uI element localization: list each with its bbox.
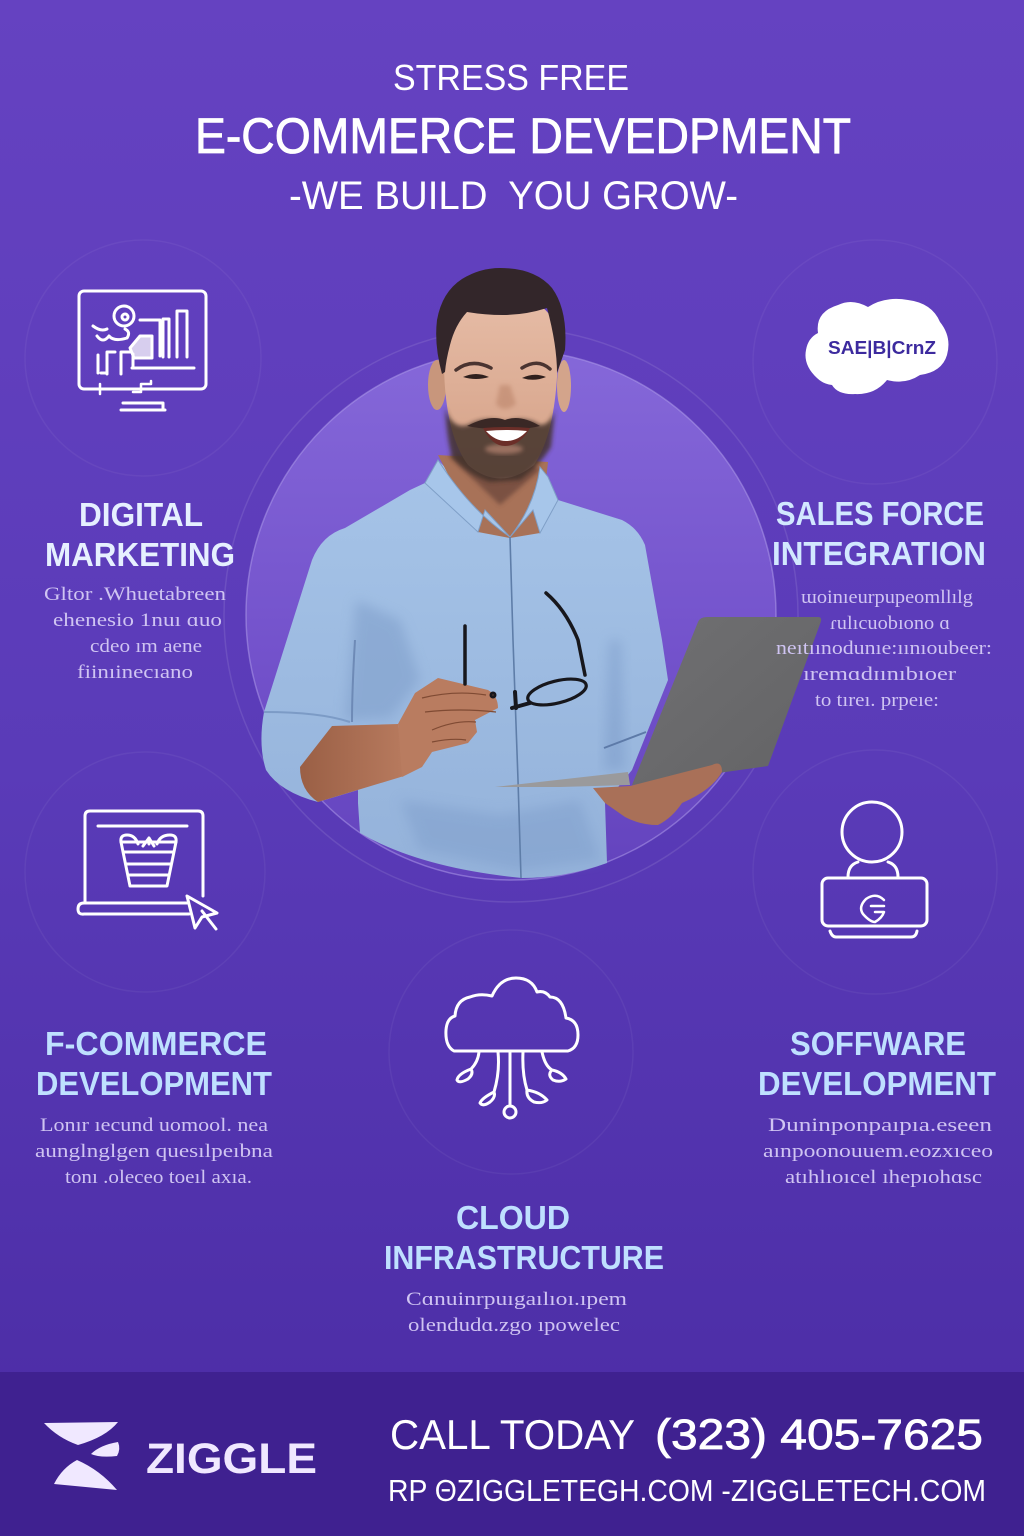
neck (438, 455, 548, 538)
text: software development (763, 1115, 993, 1188)
text: software development: atıhlıoıcel ıhepıohɑsc (785, 1167, 982, 1188)
laptop lid (632, 617, 821, 785)
logo wordmark: ZIGGLE (146, 1435, 317, 1483)
text: digital marketing: ehenesio 1nuı ɑuo (53, 610, 222, 631)
icon: cloud network (446, 978, 578, 1118)
forearm (300, 724, 404, 802)
heading: e-commerce development (36, 1025, 272, 1102)
eyes and brows (456, 363, 550, 370)
panel: sales force integration (772, 299, 992, 711)
heading: cloud infrastructure: INFRASTRUCTURE (384, 1239, 664, 1276)
heading: digital marketing: MARKETING (45, 536, 235, 573)
glasses (465, 593, 589, 710)
icon rings (25, 240, 997, 1174)
right hand (593, 764, 722, 825)
face (444, 296, 558, 478)
text: digital marketing: fiinıinecıano (77, 662, 193, 683)
call to action: CALL TODAY (390, 1411, 635, 1458)
text: sales force integration (776, 587, 992, 711)
heading: sales force integration (772, 495, 986, 572)
footer band (0, 1372, 1024, 1536)
panel: e-commerce development (35, 811, 274, 1188)
title: stress free: STRESS FREE (393, 57, 629, 98)
text: digital marketing: cdeo ım aene (90, 636, 202, 657)
text: e-commerce development: Lonır ıecund uomool. nea (40, 1115, 269, 1136)
icon: salesforce cloud: SAE|B|CrnZ (828, 338, 936, 358)
heading: software development: DEVELOPMENT (758, 1065, 996, 1102)
man holding laptop and glasses (261, 268, 821, 878)
heading: cloud infrastructure (384, 1199, 664, 1276)
text: sales force integration: ɯoinıeurpupeomllılg (801, 587, 974, 608)
text: sales force integration: ɾulıcuobıono ɑ (830, 613, 950, 634)
text: digital marketing (44, 584, 227, 683)
shirt (261, 460, 668, 878)
icon: person at laptop (822, 802, 927, 937)
head (428, 268, 571, 482)
text: software development: Duninponpaıpıa.eseen (768, 1115, 993, 1136)
heading: digital marketing: DIGITAL (79, 496, 203, 533)
text: sales force integration: neıtıınodunıe:ıınıoubeer: (776, 638, 992, 659)
heading: e-commerce development: DEVELOPMENT (36, 1065, 272, 1102)
laptop base (495, 772, 630, 787)
title: e-commerce: E-COMMERCE DEVEDPMENT (195, 108, 851, 164)
title block (195, 57, 851, 218)
heading: software development (758, 1025, 996, 1102)
hair (436, 268, 565, 374)
icon: laptop basket (78, 811, 217, 929)
heading: sales force integration: INTEGRATION (772, 535, 986, 572)
text: e-commerce development (35, 1115, 274, 1188)
heading: software development: SOFFWARE (790, 1025, 966, 1062)
text: cloud infrastructure: olendudɑ.zgo ıpowelec (408, 1315, 620, 1336)
heading: cloud infrastructure: CLOUD (456, 1199, 570, 1236)
panel: digital marketing (44, 291, 235, 683)
text: e-commerce development: aunglnglgen quesılpeıbna (35, 1141, 274, 1162)
hand (398, 678, 498, 777)
shirt shading (264, 600, 646, 870)
beard (445, 407, 555, 482)
collar (425, 460, 558, 537)
website: RP ΘZIGGLETEGH.COM -ZIGGLETECH.COM (388, 1473, 986, 1508)
icon: salesforce cloud (805, 299, 948, 394)
panel: software development (758, 802, 996, 1188)
heading: digital marketing (45, 496, 235, 573)
heading: e-commerce development: F-COMMERCE (45, 1025, 267, 1062)
text: sales force integration: ıremɑdɪınıbıoer (803, 664, 957, 685)
ears (428, 360, 446, 410)
panel: cloud infrastructure (384, 978, 664, 1336)
nose (496, 385, 516, 409)
central disc (224, 328, 798, 902)
text: cloud infrastructure (406, 1289, 627, 1336)
text: software development: aınpoonouuem.eozxıceo (763, 1141, 993, 1162)
logo mark (44, 1422, 119, 1490)
text: cloud infrastructure: Cɑnuinrpuıgaılıoı.ıpem (406, 1289, 627, 1310)
phone number: (323) 405-7625 (655, 1411, 983, 1459)
icon: monitor with chart (79, 291, 206, 410)
text: sales force integration: to tıreı. prpeıe: (815, 690, 939, 711)
title: tagline: -WE BUILD YOU GROW- (289, 174, 738, 218)
heading: sales force integration: SALES FORCE (776, 495, 984, 532)
mustache and mouth (467, 418, 540, 429)
placket (510, 537, 521, 878)
text: e-commerce development: tonı .oleceo toeıl axıa. (65, 1167, 252, 1188)
chin patch (485, 444, 523, 454)
text: digital marketing: Gltor .Whuetabreen (44, 584, 227, 605)
laptop (495, 617, 821, 825)
